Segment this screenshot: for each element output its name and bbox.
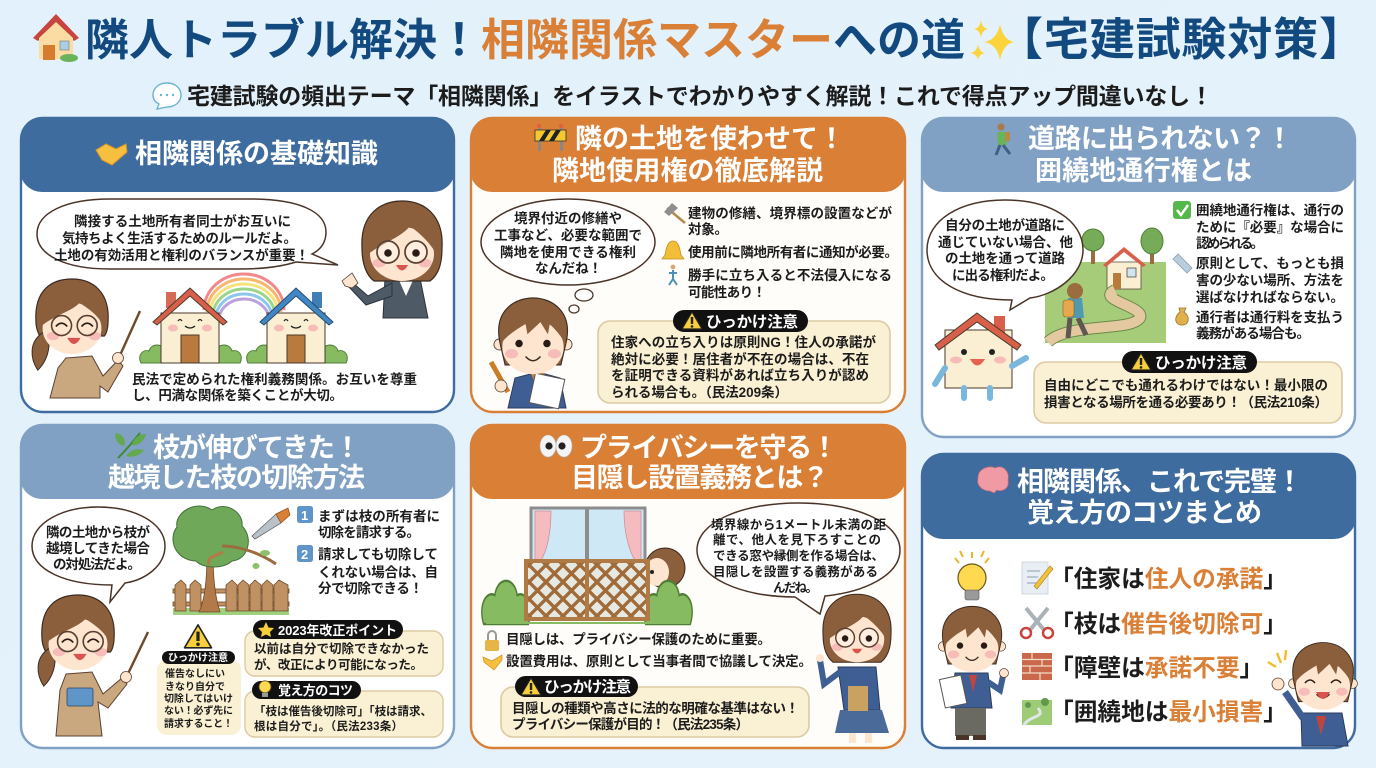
title — [33, 14, 1364, 65]
heading: 越境した枝の切除方法: 越境した枝の切除方法 — [108, 463, 365, 493]
bullet: ruler: 選ばなければならない。 — [1196, 289, 1344, 305]
callout: ひっかけ注意: ひっかけ注意 — [706, 313, 798, 331]
callout: ひっかけ注意: 住家への立ち入りは原則NG！住人の承諾が — [611, 334, 876, 350]
step 1: まずは枝の所有者に — [318, 508, 440, 524]
bullet: bell: 使用前に隣地所有者に通知が必要。 — [688, 244, 898, 260]
step 2: 2 — [301, 547, 308, 562]
speech bubble: んだね。 — [773, 581, 818, 595]
speech bubble: 通じていない場合、他 — [938, 234, 1074, 250]
speech bubble: 境界線から1メートル未満の距 — [711, 517, 886, 532]
speech bubble: の土地を通って道路 — [945, 250, 1066, 266]
heading: 隣地使用権の徹底解説: 隣地使用権の徹底解説 — [552, 156, 823, 186]
bullet: hammer: 建物の修繕、境界標の設置などが — [688, 205, 892, 221]
callout: 2023年改正ポイント: 2023年改正ポイント — [278, 623, 397, 638]
illustration: window with lattice screen — [482, 508, 692, 624]
bullet: lock — [485, 631, 771, 651]
bullet: hammer — [664, 203, 892, 237]
panel: 覚え方のコツまとめ — [921, 453, 1357, 748]
title: への道 — [833, 16, 965, 65]
heading: 相隣関係、これで完璧！覚え方のコツまとめ: 相隣関係、これで完璧！ — [1017, 467, 1303, 497]
step 1: 切除を請求する。 — [318, 524, 420, 540]
illustration: boy with clipboard — [938, 606, 1008, 740]
callout: ひっかけ注意: 目隠しの種類や高さに法的な明確な基準はない！ — [512, 700, 799, 716]
speech bubble — [927, 200, 1083, 310]
callout: ひっかけ注意: プライバシー保護が目的！（民法235条） — [512, 716, 749, 732]
title: 相隣関係マスター — [481, 16, 833, 65]
icon: handshake — [96, 144, 127, 165]
illustration: boy with notepad — [491, 298, 572, 409]
heading: 囲繞地通行権とは: 道路に出られない？！ — [1028, 124, 1293, 154]
heading: 目隠し設置義務とは？: 目隠し設置義務とは？ — [571, 463, 829, 493]
item: memo: 「住家は住人の承諾」 — [1050, 566, 1287, 593]
callout: ひっかけ注意 small: 切除してはいけ — [164, 692, 233, 705]
thought bubble — [481, 199, 655, 313]
speech bubble: 土地の有効活用と権利のバランスが重要！ — [54, 247, 309, 263]
bullet: check: ために『必要』な場合に — [1196, 219, 1344, 235]
heading: 越境した枝の切除方法 — [20, 424, 455, 499]
callout: ひっかけ注意 small: 請求すること！ — [164, 717, 233, 730]
panel: 越境した枝 — [20, 424, 455, 748]
speech bubble: 隣接する土地所有者同士がお互いに — [74, 213, 291, 229]
callout: ひっかけ注意 small — [157, 651, 241, 735]
bullet: check — [1173, 201, 1344, 251]
icon: light bulb — [955, 551, 989, 600]
callout: ひっかけ注意 small: ひっかけ注意 — [168, 651, 228, 664]
bullet: handshake: 設置費用は、原則として当事者間で協議して決定。 — [506, 653, 812, 669]
callout: ひっかけ注意 small: きなり自分で — [165, 680, 225, 693]
illustration: path scene — [1045, 228, 1166, 343]
bullet: ruler — [1173, 254, 1344, 305]
thought bubble: なんだね！ — [535, 261, 602, 276]
illustration: rainbow — [204, 274, 284, 320]
thought bubble: 境界付近の修繕や — [514, 210, 622, 226]
speech bubble: 越境してきた場合 — [46, 540, 150, 556]
thought bubble: 隣地を使用できる権利 — [500, 244, 636, 260]
callout: ひっかけ注意: 自由にどこでも通れるわけではない！最小限の — [1044, 377, 1328, 393]
heading: 目隠し設置義務とは？: プライバシーを守る！ — [580, 433, 838, 463]
icon: construction barrier — [535, 124, 566, 151]
icon: eyes — [540, 435, 572, 457]
callout: ひっかけ注意: ひっかけ注意 — [1155, 354, 1247, 372]
bullet: walker: 勝手に立ち入ると不法侵入になる — [688, 267, 892, 283]
callout: ひっかけ注意 — [501, 676, 809, 737]
heading: 目隠し設置義務とは？ — [470, 424, 906, 499]
heading: 越境した枝の切除方法: 枝が伸びてきた！ — [153, 432, 361, 463]
title: 【宅建試験対策】 — [998, 14, 1364, 65]
panel: 隣地使用権 — [470, 117, 906, 412]
text: civil law note — [132, 371, 417, 403]
icon: saw — [252, 508, 290, 539]
item: scissors: 「枝は催告後切除可」 — [1050, 611, 1287, 638]
callout: 2023年改正ポイント: が、改正により可能になった。 — [254, 657, 423, 672]
speech bubble — [697, 503, 900, 614]
speech bubble — [37, 199, 338, 269]
heading: 隣地使用権の徹底解説 — [470, 117, 906, 192]
panel: 囲繞地通行権 — [921, 117, 1356, 437]
callout: 覚え方のコツ: 根は自分で」。（民法233条） — [254, 719, 403, 733]
icon: warning triangle — [184, 625, 212, 648]
heading: 隣地使用権の徹底解説: 隣の土地を使わせて！ — [575, 124, 845, 154]
speech bubble: 離で、他人を見下ろすことの — [713, 532, 881, 547]
panel: 目隠し設置義務 — [470, 424, 906, 748]
step 2 — [297, 545, 438, 596]
illustration: tree and fence — [173, 506, 289, 615]
heading: 相隣関係の基礎知識 — [20, 117, 455, 192]
illustration: blue-roof house — [247, 288, 347, 363]
callout: ひっかけ注意: ひっかけ注意 — [544, 678, 631, 696]
callout: 覚え方のコツ: 覚え方のコツ — [278, 683, 353, 698]
bullet: walker: 可能性あり！ — [688, 284, 766, 300]
bullet: check: 囲繞地通行権は、通行の — [1196, 202, 1344, 218]
illustration: girl student — [816, 594, 891, 743]
bullet: check: 認められる。 — [1196, 236, 1264, 251]
illustration: house character — [935, 313, 1026, 398]
heading: 囲繞地通行権とは — [921, 117, 1356, 192]
thought bubble: 工事など、必要な範囲で — [494, 227, 642, 243]
callout: ひっかけ注意: 絶対に必要！居住者が不在の場合は、不在 — [611, 351, 869, 367]
step 1 — [297, 506, 440, 540]
step 2: 請求しても切除して — [318, 546, 438, 562]
speech bubble: の対処法だよ。 — [53, 556, 141, 572]
callout: 覚え方のコツ: 「枝は催告後切除可」「枝は請求、 — [254, 704, 432, 718]
heading: 相隣関係の基礎知識: 相隣関係の基礎知識 — [135, 139, 378, 169]
bullet: money bag — [1176, 308, 1344, 341]
callout: 2023年改正ポイント: 以前は自分で切除できなかった — [254, 641, 429, 656]
bullet: ruler: 害の少ない場所、方法を — [1196, 272, 1344, 288]
item: map with road: 「囲繞地は最小損害」 — [1050, 699, 1287, 726]
callout: ひっかけ注意: られる場合も。（民法209条） — [611, 384, 788, 400]
heading: 相隣関係、これで完璧！覚え方のコツまとめ — [921, 453, 1356, 539]
callout: ひっかけ注意: 損害となる場所を通る必要あり！（民法210条） — [1044, 394, 1328, 410]
callout: ひっかけ注意 — [598, 310, 890, 403]
callout: ひっかけ注意: を証明できる資料があれば立ち入りが認め — [611, 367, 869, 383]
bullet: ruler: 原則として、もっとも損 — [1196, 255, 1344, 271]
callout: 覚え方のコツ — [245, 681, 443, 737]
illustration: woman right — [342, 201, 442, 318]
step 2: 分で切除できる！ — [318, 580, 423, 596]
callout: ひっかけ注意 small: 催告なしにい — [165, 667, 225, 680]
illustration: woman left with pointer — [32, 279, 140, 398]
callout: 2023年改正ポイント — [245, 620, 443, 676]
panel: 相隣関係の基礎知識 — [20, 117, 455, 412]
subtitle: 宅建試験の頻出テーマ「相隣関係」をイラストでわかりやすく解説！これで得点アップ間違いなし！ — [187, 83, 1213, 109]
icon: sparkles — [970, 20, 1014, 60]
bullet: lock: 目隠しは、プライバシー保護のために重要。 — [506, 631, 771, 647]
bullet: hammer: 対象。 — [688, 221, 728, 237]
bullet: money bag: 通行者は通行料を支払う — [1196, 309, 1344, 325]
step 2: くれない場合は、自 — [318, 564, 438, 580]
icon: brain — [978, 467, 1008, 493]
title: 隣人トラブル解決！ — [85, 16, 481, 65]
speech bubble: 目隠しを設置する義務がある — [713, 564, 878, 579]
bullet: money bag: 義務がある場合も。 — [1196, 325, 1310, 341]
illustration: teacher with tablet — [38, 595, 148, 736]
icon: house — [33, 14, 79, 62]
text: civil law note: し、円満な関係を築くことが大切。 — [132, 387, 343, 403]
speech bubble: できる窓や縁側を作る場合は、 — [713, 548, 884, 563]
bullet: walker — [669, 265, 892, 300]
speech bubble: に出る権利だよ。 — [952, 267, 1054, 283]
speech bubble — [32, 507, 165, 602]
step 1: 1 — [301, 508, 308, 523]
text: civil law note: 民法で定められた権利義務関係。お互いを尊重 — [132, 371, 417, 387]
speech bubble: 隣の土地から枝が — [46, 524, 150, 540]
callout: ひっかけ注意 — [1034, 351, 1342, 423]
icon: walking person — [996, 123, 1010, 155]
heading: 相隣関係、これで完璧！覚え方のコツまとめ: 覚え方のコツまとめ — [1027, 498, 1262, 528]
callout: ひっかけ注意 small: ない！必ず先に — [164, 704, 233, 717]
speech bubble: 気持ちよく生活するためのルールだよ。 — [62, 230, 297, 246]
heading: 囲繞地通行権とは: 囲繞地通行権とは — [1035, 156, 1252, 186]
item: brick wall: 「障壁は承諾不要」 — [1050, 655, 1263, 682]
illustration: red-roof house — [140, 288, 241, 363]
illustration: cheering boy — [1268, 643, 1357, 746]
icon: speech balloon — [153, 83, 181, 109]
icon: herb — [115, 433, 146, 458]
speech bubble: 自分の土地が道路に — [945, 217, 1065, 233]
